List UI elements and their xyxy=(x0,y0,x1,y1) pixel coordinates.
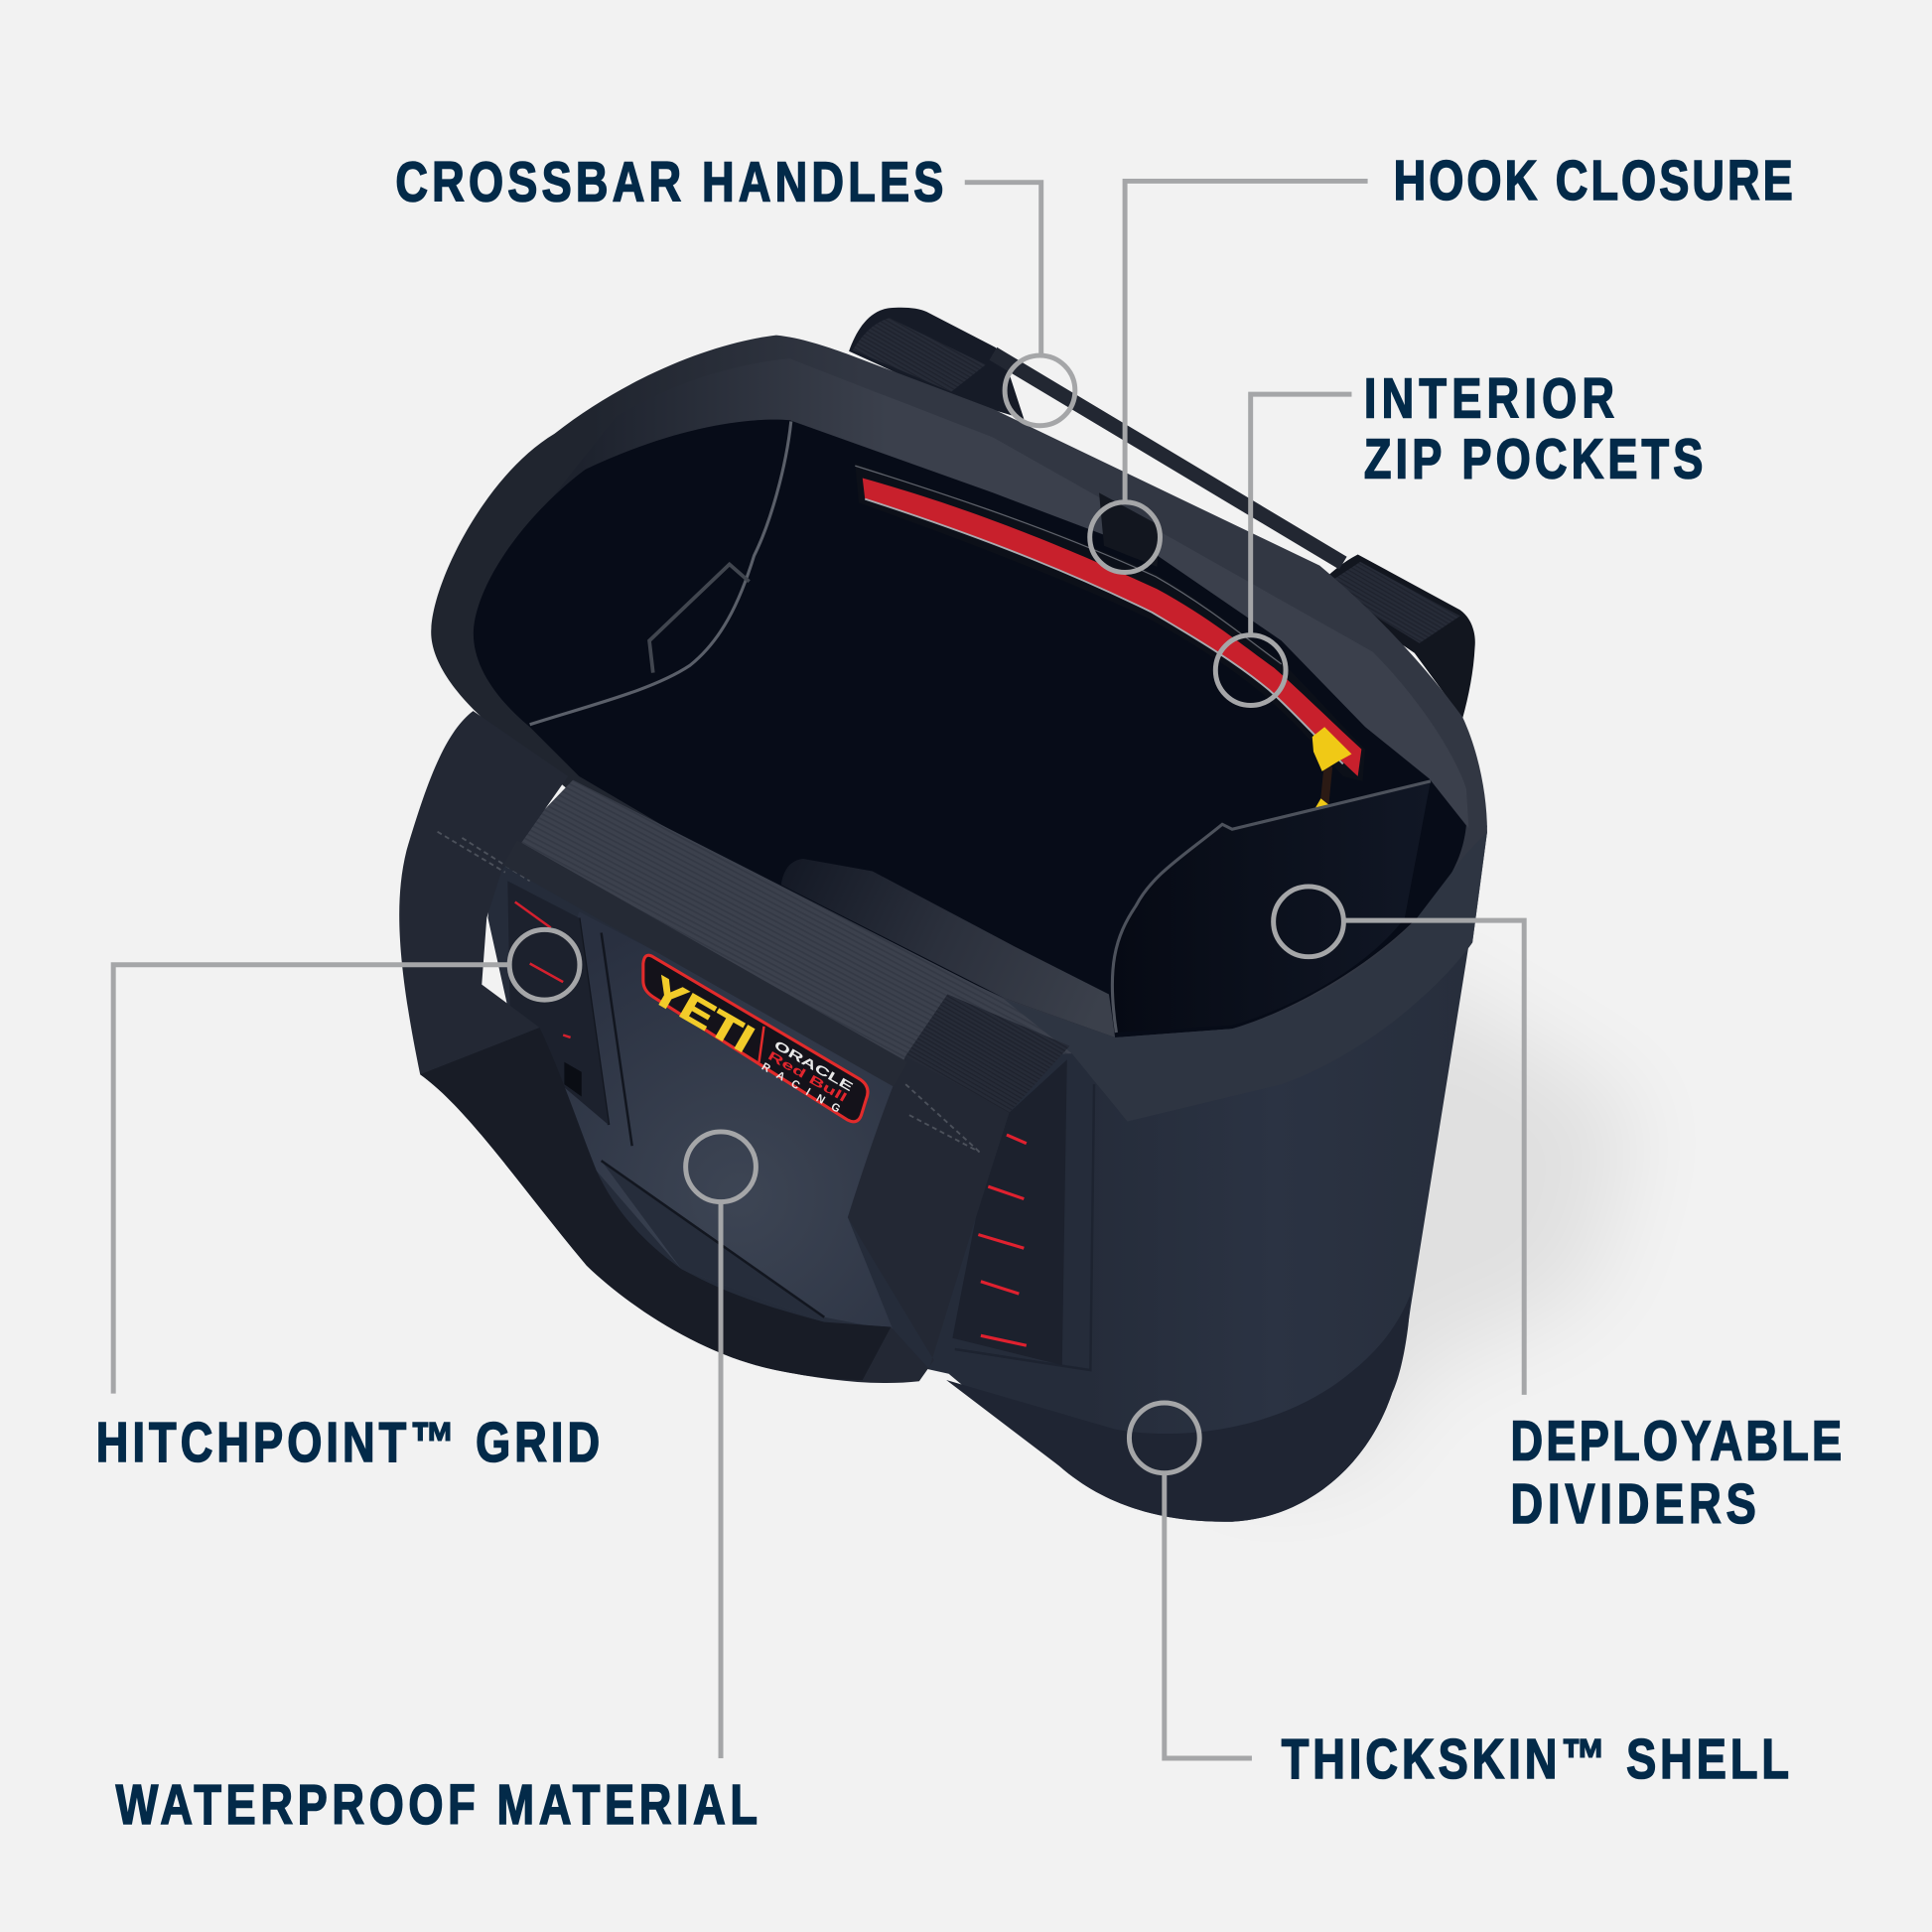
label: interior zip pockets: INTERIOR xyxy=(1364,367,1614,430)
bag interior xyxy=(474,420,1466,1037)
left hitchpoint grid xyxy=(507,881,609,1125)
label: interior zip pockets xyxy=(1364,367,1703,490)
back twill band xyxy=(523,358,1468,828)
illustration: tote bag xyxy=(399,308,1487,1522)
label: deployable dividers xyxy=(1511,1410,1842,1535)
front crossbar handle xyxy=(510,853,900,1074)
right hitchpoint grid xyxy=(952,1059,1067,1365)
body shell xyxy=(487,826,1487,1522)
callout: thickskin shell xyxy=(1129,1403,1252,1758)
right deployable divider xyxy=(1112,781,1431,1033)
callout: hook closure xyxy=(1090,181,1368,572)
label: waterproof material: WATERPROOF MATERIAL xyxy=(116,1773,758,1836)
label: interior zip pockets: ZIP POCKETS xyxy=(1364,428,1703,490)
cushion floor pad xyxy=(781,859,1115,1037)
strap top webbing xyxy=(905,995,1069,1113)
label: hitchpoint grid: HITCHPOINT™ GRID xyxy=(96,1411,600,1473)
Oracle Red Bull Racing wordmark xyxy=(759,1037,856,1116)
callout: deployable dividers xyxy=(1274,887,1524,1395)
rim outer edge xyxy=(431,336,1487,1121)
label: hook closure: HOOK CLOSURE xyxy=(1394,149,1793,211)
back handle xyxy=(849,308,1475,719)
label: deployable dividers: DEPLOYABLE xyxy=(1511,1410,1842,1472)
callout: crossbar handles xyxy=(965,183,1075,426)
strap stitching xyxy=(438,832,980,1152)
interior zip pocket xyxy=(855,464,1365,781)
callout: waterproof material xyxy=(686,1132,756,1758)
front panel xyxy=(540,911,911,1330)
label: deployable dividers: DIVIDERS xyxy=(1511,1472,1756,1535)
logo patch xyxy=(643,955,868,1122)
callout: hitchpoint grid xyxy=(113,929,580,1394)
Oracle Red Bull Racing wordmark: Red Bull xyxy=(765,1048,849,1105)
front handle xyxy=(399,711,1069,1383)
right front rim band xyxy=(1004,832,1487,1121)
label: thickskin shell: THICKSKIN™ SHELL xyxy=(1282,1727,1789,1790)
left divider xyxy=(530,421,791,725)
lower handle webbing xyxy=(420,1028,891,1380)
Oracle Red Bull Racing wordmark: RACING xyxy=(759,1061,842,1116)
Oracle Red Bull Racing wordmark: ORACLE xyxy=(771,1037,856,1094)
label: crossbar handles: CROSSBAR HANDLES xyxy=(395,150,943,212)
hook closure strap xyxy=(1099,492,1161,567)
front twill band xyxy=(511,780,1072,1062)
bag drop shadow xyxy=(1207,961,1639,1478)
zipper pull xyxy=(1312,727,1351,813)
YETI wordmark: YETI xyxy=(643,969,761,1061)
callout: interior zip pockets xyxy=(1215,394,1351,706)
